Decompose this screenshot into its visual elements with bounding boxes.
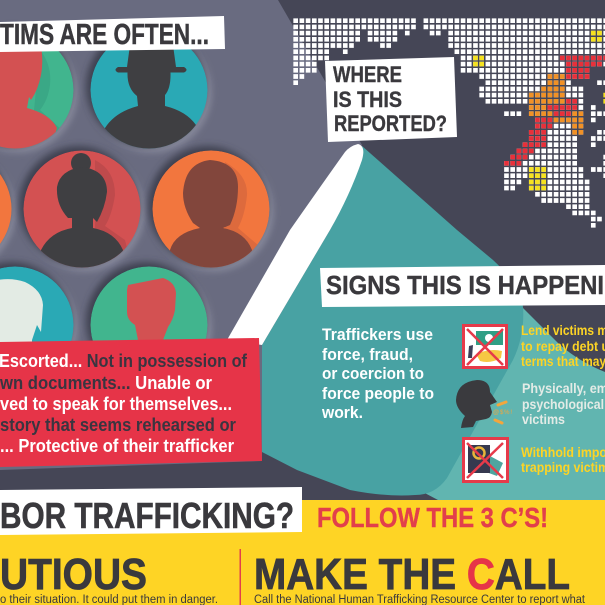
portrait: green circle <box>0 51 74 148</box>
banner text: BOR TRAFFICKING? <box>0 495 294 536</box>
callout text: ved to speak for themselves... <box>0 394 232 414</box>
panel: dark teal signs background <box>262 146 523 495</box>
callout text: ... Protective of their trafficker <box>0 436 234 456</box>
where label text: IS THIS <box>333 87 402 112</box>
title text: TIMS ARE OFTEN... <box>0 19 209 51</box>
traffickers text: force, fraud, <box>322 346 413 364</box>
circle dark halos <box>0 27 268 382</box>
icon: speaking head <box>456 380 512 428</box>
follow the 3 Cs: FOLLOW THE 3 C’S! <box>317 502 548 533</box>
circle light halos <box>0 32 273 387</box>
icon: no passport withholding <box>464 438 508 482</box>
panel: slate victims area <box>0 0 362 470</box>
yellow sign text: lend <box>521 322 605 369</box>
where label box <box>325 57 457 142</box>
column: make the call heading: MAKE THE CALL <box>254 551 570 599</box>
traffickers text: Traffickers use <box>322 326 433 344</box>
panel: light teal signs background <box>400 290 605 500</box>
red callout <box>0 338 262 467</box>
traffickers text: or coercion to <box>322 365 424 383</box>
sign text: abuse <box>522 380 605 427</box>
white swoosh <box>227 144 363 345</box>
portrait: orange left <box>0 150 12 268</box>
portrait: woman with bun <box>24 150 140 270</box>
labor trafficking banner <box>0 487 302 536</box>
callout text: wn documents... Unable or <box>0 373 212 393</box>
yellow sign text: withhold <box>521 444 605 475</box>
portrait: teal circle <box>0 266 74 342</box>
portrait: orange woman <box>152 150 270 270</box>
sign text: abuse: victims <box>522 411 565 427</box>
portrait: man with hat <box>90 49 208 148</box>
panel: yellow footer <box>0 500 605 605</box>
world map <box>293 21 605 225</box>
traffickers text: force people to <box>322 385 434 403</box>
traffickers text <box>321 326 434 422</box>
where label text: REPORTED? <box>334 111 447 136</box>
column: be cautious heading: UTIOUS <box>0 551 147 599</box>
column divider <box>240 549 241 605</box>
callout text <box>0 351 248 456</box>
traffickers text: work. <box>321 404 363 422</box>
title banner <box>0 16 225 52</box>
where label text <box>333 62 447 136</box>
callout text: story that seems rehearsed or <box>0 415 236 435</box>
callout text: Escorted... Not in possession of <box>0 351 248 371</box>
icon: speaking head: @$%! <box>493 410 512 416</box>
icon: no money lending <box>464 326 506 368</box>
portrait: green man <box>90 266 208 341</box>
where label text: WHERE <box>333 62 402 87</box>
signs banner <box>320 265 605 307</box>
